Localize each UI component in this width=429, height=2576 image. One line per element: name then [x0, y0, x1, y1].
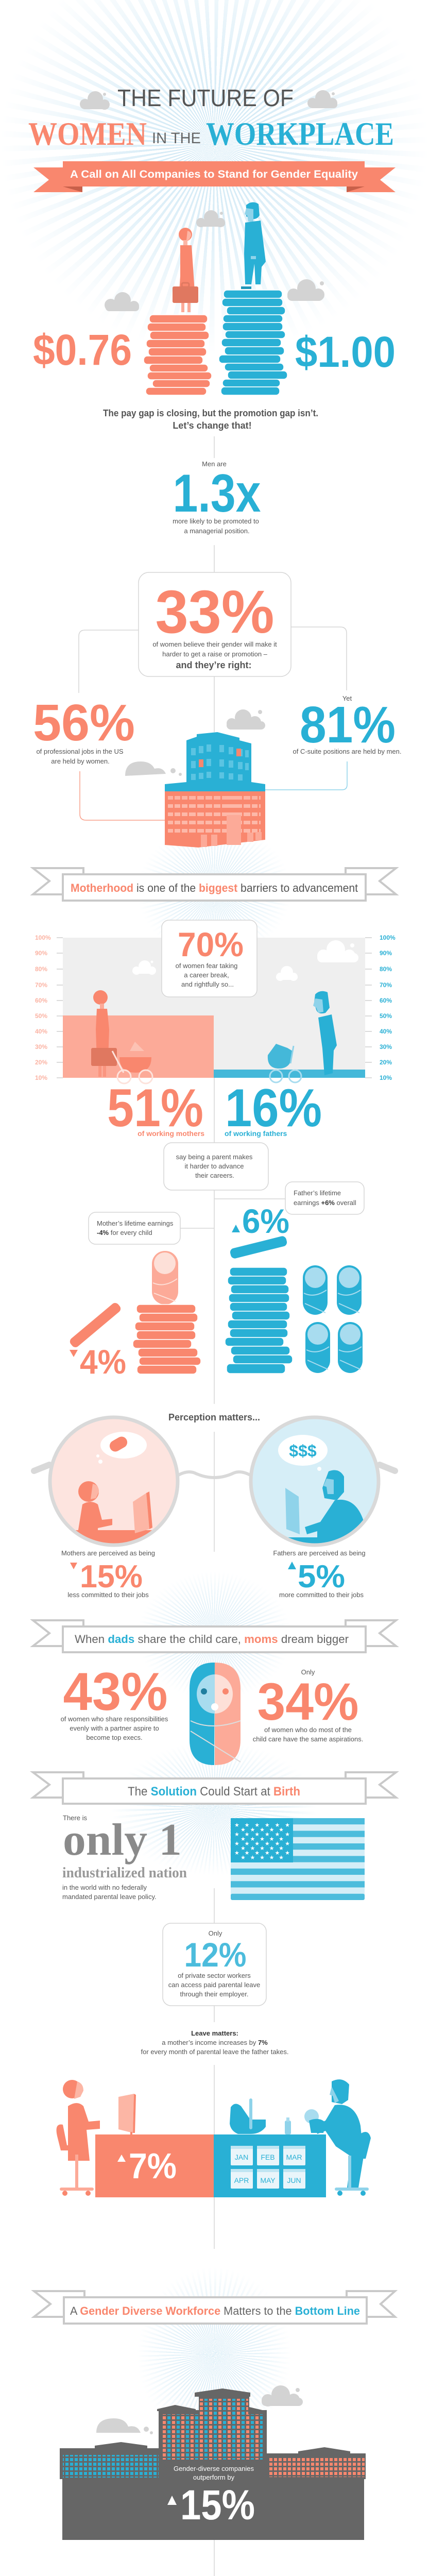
chart: motherhood barriers: 40%	[380, 1028, 392, 1035]
stat: +7%: 7%	[129, 2146, 177, 2186]
text: pay gap: The pay gap is closing, but the promotion gap isn’t.	[103, 408, 318, 418]
stat: only 1 nation: mandated parental leave policy.	[62, 1893, 157, 1901]
calendars: APR	[234, 2176, 249, 2184]
icon: US flag: ★ ★ ★ ★ ★ ★	[234, 1832, 290, 1838]
title: THE FUTURE OF	[117, 84, 294, 111]
stat: only 1 nation	[62, 1814, 187, 1901]
calendars	[231, 2146, 305, 2189]
box: mothers earnings	[89, 1212, 180, 1244]
stat: +6%: 6%	[242, 1202, 289, 1240]
calendars: JAN	[235, 2153, 248, 2161]
stat: 16% fathers: 16%	[225, 1078, 322, 1138]
man at desk in lens	[278, 1435, 364, 1544]
chart: motherhood barriers: 60%	[380, 997, 392, 1004]
rays: solution ribbon	[128, 1752, 301, 1865]
chart: motherhood barriers: 50%	[380, 1012, 392, 1020]
stat: only 1 nation: in the world with no federally	[62, 1884, 147, 1891]
box: parent harder: it harder to advance	[185, 1162, 244, 1170]
box: 70%: of women fear taking	[176, 962, 237, 970]
stat: 1.3x	[173, 460, 261, 535]
man figure on coins	[241, 202, 266, 289]
ribbon: call on all companies: A Call on All Companies to Stand for Gender Equality	[70, 168, 358, 180]
box: parent harder	[164, 1143, 268, 1190]
stat: 34%: Only	[301, 1668, 315, 1676]
rays: below building	[150, 842, 278, 933]
text: pay gap: Let’s change that!	[173, 420, 252, 431]
woman with stroller	[91, 990, 152, 1083]
icon: US flag: ★ ★ ★ ★ ★	[241, 1845, 284, 1852]
cloud: near man	[196, 210, 225, 227]
chart: motherhood barriers: 20%	[380, 1059, 392, 1066]
city: gender-diverse companies: Gender-diverse companies	[174, 2465, 254, 2472]
box: mothers earnings: -4% for every child	[97, 1229, 152, 1236]
stat: 16% fathers: of working fathers	[225, 1129, 287, 1138]
rays: gender diverse ribbon	[149, 2281, 279, 2410]
city: gender-diverse companies: 15%	[180, 2482, 255, 2529]
box: mothers earnings: Mother’s lifetime earnings	[97, 1219, 174, 1227]
box: 33%: and they’re right:	[176, 660, 252, 670]
tilted coin coral	[68, 1301, 122, 1349]
box: parent harder: say being a parent makes	[176, 1153, 253, 1161]
stat: 43%: 43%	[63, 1662, 168, 1722]
title: WOMEN	[28, 115, 147, 152]
chart: motherhood barriers: 50%	[35, 1012, 47, 1020]
stat: fathers +5%: more committed to their jobs	[279, 1591, 364, 1599]
cloud: right lower	[287, 279, 324, 301]
car seat, bottle, man with baby	[230, 2079, 371, 2196]
box: fathers earnings: earnings +6% overall	[294, 1199, 356, 1207]
box: 33%: of women believe their gender will make it	[152, 640, 277, 648]
stat: 56%: are held by women.	[51, 757, 110, 765]
woman at desk in lens	[76, 1432, 152, 1544]
chart: motherhood barriers: 100%	[35, 934, 51, 941]
chart: motherhood barriers: 20%	[35, 1059, 47, 1066]
stat: $0.76: $0.76	[33, 326, 132, 374]
stat: mothers -15%: Mothers are perceived as being	[61, 1549, 155, 1557]
box: 70%: a career break,	[184, 971, 229, 979]
cloud: title right	[307, 90, 337, 108]
ribbon: dads share child care	[33, 1620, 396, 1652]
box: parent harder: their careers.	[195, 1172, 234, 1179]
box: 12%: can access paid parental leave	[168, 1981, 260, 1989]
icon: US flag	[231, 1818, 365, 1900]
coin stack blue	[225, 1267, 293, 1374]
stat: fathers +5%	[273, 1549, 366, 1599]
box: 12%: through their employer.	[180, 1990, 248, 1998]
clouds in chart	[132, 960, 156, 975]
coin stack: women	[144, 315, 212, 395]
glasses: perception	[31, 1416, 398, 1547]
stat: 81%: 81%	[300, 696, 396, 754]
stat: fathers +5%: 5%	[298, 1559, 345, 1595]
box: 12%: 12%	[184, 1936, 246, 1974]
text: leave matters	[141, 2029, 288, 2056]
box: 70%: and rightfully so...	[181, 980, 234, 988]
chart: motherhood barriers: 70%	[380, 981, 392, 989]
man at desk in lens: $$$	[289, 1442, 317, 1460]
title: WORKPLACE	[206, 115, 394, 152]
stat: 43%: become top execs.	[86, 1734, 143, 1741]
chart: motherhood barriers: 70%	[35, 981, 47, 989]
ribbon: motherhood	[33, 868, 396, 901]
text: leave matters: for every month of parental leave the father takes.	[141, 2048, 288, 2056]
icon: US flag: ★ ★ ★ ★ ★ ★	[234, 1850, 290, 1856]
box: fathers earnings: Father’s lifetime	[294, 1189, 341, 1197]
building: C-suite	[165, 732, 265, 848]
stat: mothers -15%: 15%	[80, 1559, 143, 1595]
man with stroller	[268, 991, 337, 1082]
title: IN THE	[152, 130, 201, 147]
stat: -4%: 4%	[80, 1343, 126, 1381]
stat: 1.3x: 1.3x	[173, 464, 261, 523]
coin stack coral	[133, 1304, 201, 1374]
stat: 1.3x: Men are	[202, 460, 227, 468]
box: 33%: harder to get a raise or promotion –	[162, 650, 268, 658]
chart: motherhood barriers: 80%	[380, 965, 392, 973]
calendars: MAY	[260, 2176, 276, 2184]
city: gender-diverse companies: outperform by	[193, 2473, 235, 2481]
text: leave matters: a mother’s income increases by 7%	[162, 2039, 268, 2046]
rays: dads ribbon	[151, 1582, 278, 1685]
ribbon: motherhood: Motherhood is one of the biggest barriers to advancement	[71, 882, 358, 894]
ribbon: gender diverse workforce: A Gender Diverse Workforce Matters to the Bottom Line	[70, 2304, 360, 2317]
stat: 34%: 34%	[258, 1672, 358, 1731]
title	[28, 84, 394, 152]
stat: only 1 nation: only 1	[63, 1815, 182, 1865]
chart: motherhood barriers: 60%	[35, 997, 47, 1004]
stat: 1.3x: more likely to be promoted to	[173, 517, 259, 525]
stat: 81%: Yet	[342, 694, 352, 702]
chart: motherhood barriers	[35, 934, 396, 1083]
woman figure on coins	[173, 228, 198, 312]
chart: motherhood barriers: 10%	[380, 1074, 392, 1081]
cloud: title left	[80, 91, 110, 110]
stat: 56%: 56%	[33, 694, 135, 752]
stat: only 1 nation: There is	[63, 1814, 87, 1822]
stat: only 1 nation: industrialized nation	[62, 1865, 187, 1881]
stat: 81%: of C-suite positions are held by men.	[293, 748, 402, 755]
box: 70%: 70%	[178, 925, 244, 963]
stat: 34%: of women who do most of the	[264, 1726, 352, 1734]
stat: fathers +5%: Fathers are perceived as being	[273, 1549, 366, 1557]
cloud: left lower	[105, 292, 139, 311]
rays: title	[35, 0, 394, 321]
box: 12%: Only	[209, 1929, 222, 1937]
icon: US flag: ★ ★ ★ ★ ★	[241, 1836, 284, 1842]
stat: $1.00: $1.00	[295, 328, 396, 376]
chart: motherhood barriers: 90%	[380, 950, 392, 957]
text: pay gap	[103, 408, 318, 431]
text: leave matters: Leave matters:	[191, 2029, 238, 2037]
stat: 51% mothers: 51%	[107, 1078, 203, 1138]
clouds near city	[262, 2385, 303, 2406]
ribbon: solution at birth: The Solution Could Start at Birth	[128, 1785, 300, 1799]
ribbon: solution at birth	[33, 1772, 396, 1804]
stat: 34%: child care have the same aspirations.	[253, 1735, 363, 1743]
box: fathers earnings	[285, 1182, 364, 1214]
box: 70%	[162, 920, 257, 997]
illustration: desk parental leave	[57, 2079, 371, 2197]
woman seated	[57, 2080, 136, 2196]
ribbon: call on all companies	[33, 161, 396, 192]
stat: 51% mothers: of working mothers	[138, 1129, 204, 1138]
stat: 43%: of women who share responsibilities	[61, 1715, 168, 1723]
chart: motherhood barriers: 100%	[380, 934, 396, 941]
stat: 1.3x: a managerial position.	[184, 527, 250, 535]
stat: mothers -15%: less committed to their jobs	[67, 1591, 149, 1599]
calendars: MAR	[286, 2153, 302, 2161]
calendars: JUN	[287, 2176, 301, 2184]
baby coral	[152, 1251, 178, 1304]
ribbon: gender diverse workforce	[34, 2291, 395, 2324]
chart: motherhood barriers: 80%	[35, 965, 47, 973]
coin stack: men	[219, 290, 287, 395]
chart: motherhood barriers: 40%	[35, 1028, 47, 1035]
box: 12%: of private sector workers	[178, 1972, 251, 1979]
icon: US flag: ★ ★ ★ ★ ★ ★	[234, 1822, 290, 1828]
city: gender-diverse companies	[60, 2388, 366, 2540]
chart: motherhood barriers: 10%	[35, 1074, 47, 1081]
calendars: FEB	[261, 2153, 275, 2161]
box: 12%	[163, 1923, 266, 2006]
babies blue	[303, 1265, 363, 1373]
chart: motherhood barriers: 90%	[35, 950, 47, 957]
tilted coin blue	[229, 1235, 288, 1259]
icon: US flag: ★ ★ ★ ★ ★	[241, 1827, 284, 1833]
icon: US flag: ★ ★ ★ ★ ★ ★	[234, 1841, 290, 1847]
box: 33%	[139, 572, 291, 676]
stat: 43%: evenly with a partner aspire to	[70, 1724, 159, 1732]
heading: perception matters: Perception matters...	[168, 1412, 260, 1422]
clouds near building	[227, 709, 265, 730]
chart: motherhood barriers: 30%	[35, 1043, 47, 1050]
box: 33%: 33%	[156, 578, 274, 646]
ribbon: dads share child care: When dads share the child care, moms dream bigger	[75, 1633, 349, 1646]
stat: mothers -15%	[61, 1549, 155, 1599]
connector lines to building	[80, 761, 347, 820]
chart: motherhood barriers: 30%	[380, 1043, 392, 1050]
baby split icon	[190, 1663, 241, 1765]
icon: US flag: ★ ★ ★ ★ ★	[241, 1855, 284, 1861]
stat: 56%: of professional jobs in the US	[36, 748, 124, 755]
